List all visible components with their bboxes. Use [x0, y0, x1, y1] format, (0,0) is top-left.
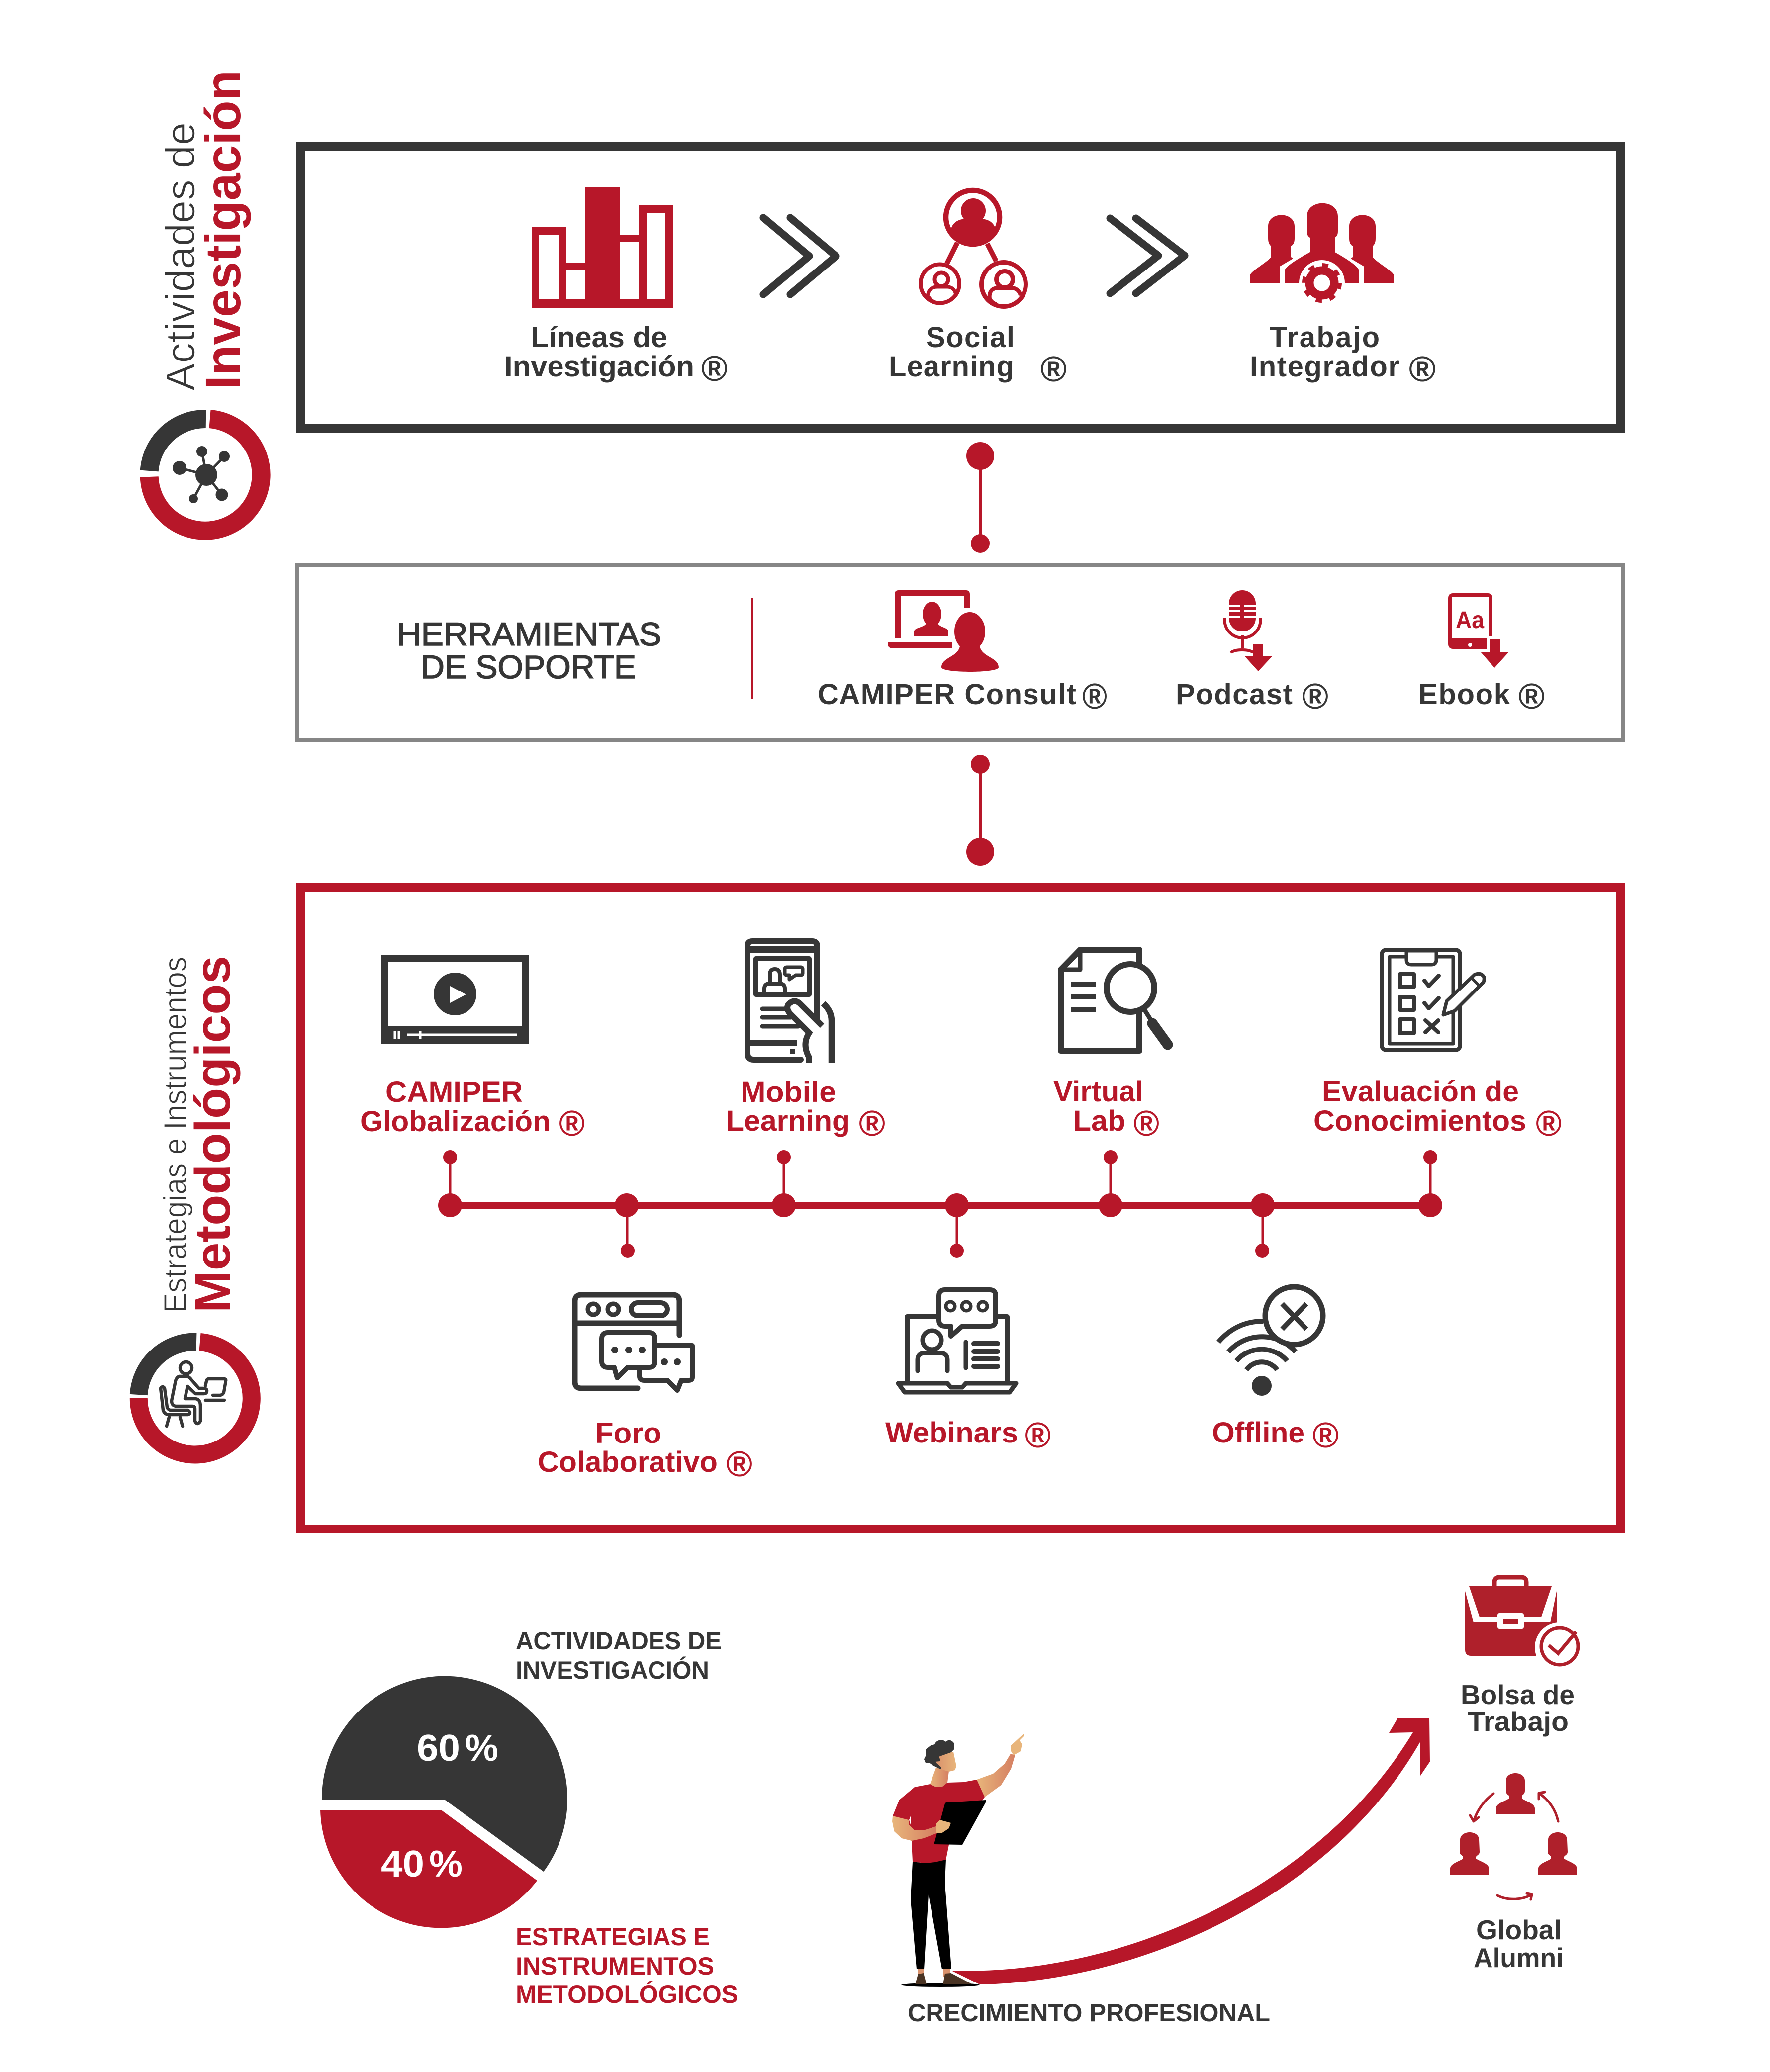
label: CAMIPER Consult: CAMIPER Consult	[818, 678, 1076, 711]
label: Evaluación de Conocimientos: Evaluación de	[1322, 1076, 1519, 1108]
label: Bolsa de Trabajo	[1461, 1679, 1575, 1737]
heading: Estrategias e Instrumentos Metodológicos	[157, 956, 241, 1313]
icon: video player	[381, 958, 529, 1044]
label: Mobile Learning	[726, 1076, 885, 1144]
label: Offline: ®	[1312, 1416, 1339, 1455]
label: Webinars	[885, 1416, 1051, 1455]
pie chart: 60 / 40: 60	[417, 1727, 460, 1769]
panel: methodological strategies	[300, 887, 1620, 1529]
label: Webinars: Webinars	[885, 1417, 1018, 1449]
arrow: double chevron 2	[1110, 218, 1185, 293]
label: Podcast: ®	[1302, 677, 1328, 717]
icon: document search	[1061, 950, 1168, 1051]
pie chart: 60 / 40	[320, 1676, 567, 1928]
label: Global Alumni	[1474, 1914, 1564, 1973]
icon: alumni network	[1450, 1773, 1577, 1899]
icon: bar chart	[532, 187, 673, 308]
timeline	[438, 1150, 1442, 1258]
illustration: person pointing up	[892, 1734, 1024, 1987]
label: Trabajo Integrador	[1250, 321, 1436, 389]
label: Social Learning: ®	[1040, 350, 1067, 389]
label: CAMIPER Globalización	[360, 1076, 585, 1144]
label: CAMIPER Globalización: ®	[559, 1104, 585, 1144]
label: Global Alumni: Global	[1476, 1914, 1562, 1945]
label: Virtual Lab: ®	[1133, 1104, 1159, 1144]
label: Mobile Learning: ®	[859, 1104, 885, 1144]
label: Estrategias e instrumentos metodológicos: ESTRATEGIAS E	[516, 1923, 710, 1951]
icon: checklist clipboard	[1382, 950, 1484, 1050]
label: Actividades de investigación	[516, 1627, 722, 1684]
label: Foro Colaborativo	[538, 1417, 752, 1484]
label: CAMIPER Globalización: CAMIPER	[385, 1076, 523, 1108]
icon: mobile learning	[747, 941, 832, 1063]
label: CAMIPER Globalización: Globalización	[360, 1105, 551, 1138]
label: CAMIPER Consult: ®	[1082, 677, 1107, 717]
label: Foro Colaborativo: Foro	[595, 1417, 661, 1449]
icon: ebook tablet	[1448, 593, 1509, 668]
icon: CAMIPER Consult	[888, 590, 999, 672]
pie chart: 60 / 40: %	[465, 1727, 498, 1769]
label: Estrategias e instrumentos metodológicos: METODOLÓGICOS	[516, 1981, 738, 2008]
label: Mobile Learning: Learning	[726, 1105, 850, 1137]
heading: Estrategias e Instrumentos Metodológicos: Estrategias e Instrumentos	[157, 957, 193, 1313]
label: Evaluación de Conocimientos: ®	[1536, 1104, 1562, 1144]
heading: Actividades de Investigación	[157, 70, 251, 391]
label: Virtual Lab	[1053, 1076, 1159, 1144]
label: Mobile Learning: Mobile	[741, 1076, 836, 1108]
connector: tools to methods	[966, 755, 994, 866]
pie chart: 60 / 40: %	[429, 1843, 463, 1885]
label: Social Learning	[889, 321, 1067, 389]
label: Líneas de Investigación: ®	[701, 349, 728, 389]
label: Trabajo Integrador: Integrador	[1250, 351, 1399, 383]
icon: team with gear	[1250, 203, 1394, 306]
label: Podcast	[1176, 677, 1328, 717]
label: Offline: Offline	[1212, 1417, 1304, 1449]
label: Foro Colaborativo: ®	[726, 1444, 752, 1484]
label: Estrategias e instrumentos metodológicos: INSTRUMENTOS	[516, 1952, 714, 1980]
icon: podcast microphone	[1224, 590, 1272, 671]
label: Bolsa de Trabajo: Trabajo	[1468, 1706, 1569, 1737]
label: Social Learning: Social	[926, 321, 1015, 354]
label: Ebook: Ebook	[1418, 678, 1510, 711]
pie chart: 60 / 40: 40	[381, 1843, 424, 1885]
icon: person at desk ring	[139, 1342, 252, 1454]
heading: Herramientas de soporte: HERRAMIENTAS	[397, 616, 661, 652]
icon: ebook tablet: Aa	[1456, 607, 1484, 633]
label: Actividades de investigación: INVESTIGACIÓN	[516, 1656, 709, 1684]
icon: offline wifi	[1218, 1287, 1323, 1396]
heading: Herramientas de soporte: DE SOPORTE	[421, 648, 636, 685]
label: Crecimiento profesional: CRECIMIENTO PROFESIONAL	[908, 1999, 1270, 2027]
label: Evaluación de Conocimientos: Conocimientos	[1313, 1105, 1526, 1137]
label: Trabajo Integrador: ®	[1409, 350, 1436, 389]
label: Bolsa de Trabajo: Bolsa de	[1461, 1679, 1575, 1710]
arrow: professional growth curve	[951, 1718, 1430, 1984]
label: Trabajo Integrador: Trabajo	[1270, 321, 1380, 354]
icon: job briefcase	[1465, 1577, 1584, 1672]
label: Evaluación de Conocimientos	[1313, 1076, 1562, 1144]
label: Ebook	[1418, 677, 1545, 717]
heading: Herramientas de soporte	[397, 616, 661, 685]
heading: Actividades de Investigación: Investigación	[195, 70, 251, 389]
label: Estrategias e instrumentos metodológicos	[516, 1923, 738, 2008]
label: Podcast: Podcast	[1176, 678, 1293, 711]
label: Virtual Lab: Lab	[1073, 1105, 1125, 1137]
label: Global Alumni: Alumni	[1474, 1942, 1564, 1973]
label: Líneas de Investigación: Investigación	[504, 351, 694, 383]
icon: social learning network	[921, 190, 1025, 306]
arrow: double chevron 1	[763, 218, 836, 294]
label: Offline	[1212, 1416, 1339, 1455]
panel: research activities	[300, 146, 1621, 428]
heading: Actividades de Investigación: Actividades de	[157, 122, 203, 391]
label: Social Learning: Learning	[889, 351, 1014, 383]
label: Actividades de investigación: ACTIVIDADES DE	[516, 1627, 722, 1655]
icon: webinar laptop	[898, 1290, 1016, 1392]
label: Líneas de Investigación: Líneas de	[531, 321, 667, 354]
label: Foro Colaborativo: Colaborativo	[538, 1446, 718, 1478]
label: Virtual Lab: Virtual	[1053, 1076, 1143, 1108]
icon: research network ring	[149, 419, 261, 531]
label: Ebook: ®	[1518, 677, 1545, 717]
label: Webinars: ®	[1025, 1416, 1051, 1455]
panel: support tools	[297, 565, 1623, 740]
label: Líneas de Investigación	[504, 321, 728, 389]
icon: forum window	[575, 1295, 692, 1390]
heading: Estrategias e Instrumentos Metodológicos: Metodológicos	[185, 956, 241, 1313]
connector: research to tools	[966, 442, 994, 553]
